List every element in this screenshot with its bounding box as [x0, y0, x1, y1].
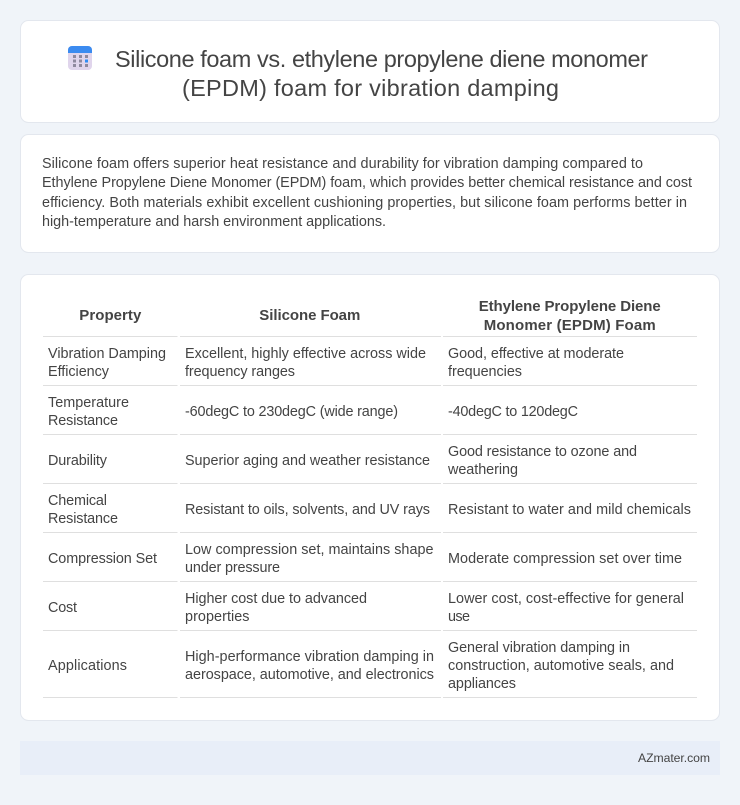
row: durability: Good resistance to ozone and: [448, 444, 637, 460]
row: applications: [48, 640, 674, 692]
row: applications: aerospace, automotive, and electronics: [185, 667, 434, 683]
row: durability: Durability: [48, 453, 108, 469]
row: chemical resistance: [48, 493, 691, 527]
row: cost: properties: [185, 609, 250, 625]
row: vibration damping efficiency: Good, effective at moderate: [448, 346, 624, 362]
row: cost: Cost: [48, 600, 77, 616]
title: Silicone foam vs. ethylene propylene diene monomer: [115, 46, 648, 72]
table header: Property: [79, 307, 142, 324]
row: chemical resistance: Resistant to oils, solvents, and UV rays: [185, 502, 430, 518]
row: applications: appliances: [448, 676, 516, 692]
row: durability: [48, 444, 637, 478]
row: vibration damping efficiency: [48, 346, 624, 380]
row: vibration damping efficiency: Vibration Damping: [48, 346, 166, 362]
footer credit: AZmater.com: [638, 751, 710, 765]
panel: comparison table card: [20, 274, 720, 720]
row: temperature resistance: Temperature: [48, 395, 129, 411]
summary text: [42, 156, 692, 230]
row: compression set: Moderate compression set over time: [448, 551, 682, 567]
row: compression set: [48, 542, 682, 576]
row: cost: [48, 591, 684, 625]
summary text: Silicone foam offers superior heat resistance and durability for vibration damping compared to: [42, 156, 643, 172]
row: chemical resistance: Resistance: [48, 511, 118, 527]
row: temperature resistance: -40degC to 120degC: [448, 404, 578, 420]
row: compression set: Compression Set: [48, 551, 157, 567]
footer bar: [20, 741, 720, 775]
row: temperature resistance: -60degC to 230degC (wide range): [185, 404, 398, 420]
row: compression set: Low compression set, maintains shape: [185, 542, 434, 558]
row: cost: Lower cost, cost-effective for general: [448, 591, 684, 607]
summary text: efficiency. Both materials exhibit excellent cushioning properties, but silicone foam performs better in: [42, 195, 687, 211]
row: chemical resistance: Resistant to water and mild chemicals: [448, 502, 691, 518]
row: vibration damping efficiency: frequencies: [448, 364, 522, 380]
table header: Ethylene Propylene Diene: [479, 298, 661, 315]
icon: calendar: [68, 46, 92, 70]
row: applications: General vibration damping in: [448, 640, 630, 656]
row: applications: High-performance vibration damping in: [185, 649, 434, 665]
row: temperature resistance: Resistance: [48, 413, 118, 429]
table header: [79, 298, 661, 334]
row: temperature resistance: [48, 395, 578, 429]
table header: Monomer (EPDM) Foam: [484, 317, 656, 334]
row: durability: weathering: [447, 462, 518, 478]
row: vibration damping efficiency: frequency ranges: [185, 364, 295, 380]
row: cost: use: [448, 609, 470, 625]
row: vibration damping efficiency: Efficiency: [48, 364, 110, 380]
row: cost: Higher cost due to advanced: [185, 591, 367, 607]
table rules: [43, 336, 697, 698]
summary text: Ethylene Propylene Diene Monomer (EPDM) foam, which provides better chemical resistance and cost: [42, 175, 692, 191]
summary text: high-temperature and harsh environment applications.: [42, 214, 386, 230]
row: vibration damping efficiency: Excellent, highly effective across wide: [185, 346, 426, 362]
table header: Silicone Foam: [259, 307, 360, 324]
panel: summary card: [20, 134, 720, 252]
title: (EPDM) foam for vibration damping: [182, 75, 559, 101]
row: compression set: under pressure: [185, 560, 280, 576]
title: [115, 46, 648, 101]
row: applications: construction, automotive seals, and: [448, 658, 674, 674]
row: durability: Superior aging and weather resistance: [185, 453, 430, 469]
panel: title card: [20, 20, 720, 122]
row: applications: Applications: [48, 658, 127, 674]
row: chemical resistance: Chemical: [48, 493, 107, 509]
